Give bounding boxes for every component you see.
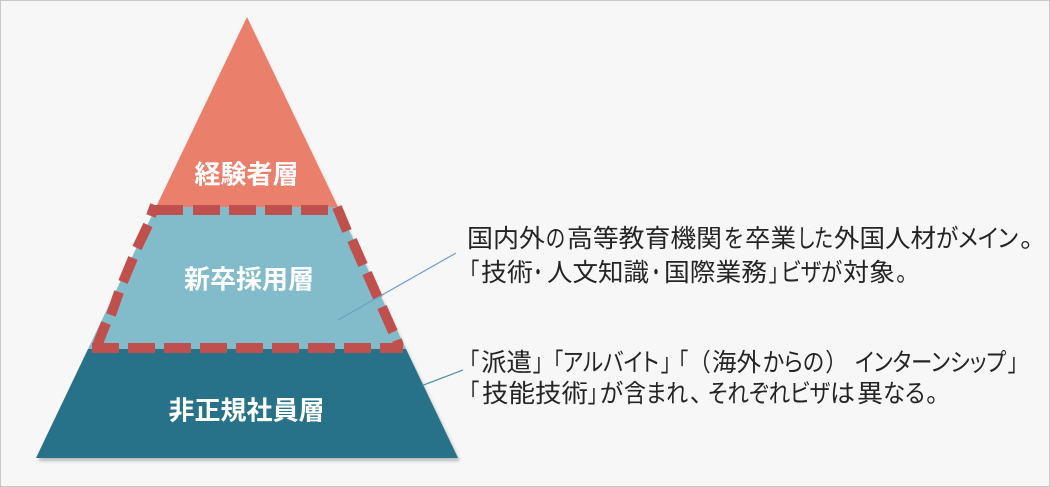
callout text: non-regular employees: 」 <box>1008 343 1018 379</box>
callout text: non-regular employees: 含まれ <box>624 374 688 410</box>
callout text: new graduates: 技術 <box>481 253 533 289</box>
callout text: non-regular employees: は <box>830 374 855 410</box>
callout text: non-regular employees: ビザ <box>790 374 830 410</box>
callout text: non-regular employees: ） <box>826 343 837 379</box>
callout text: non-regular employees: 。 <box>926 374 938 410</box>
callout text: new graduates: 「 <box>469 253 479 289</box>
callout text: non-regular employees: （ <box>699 343 710 379</box>
callout text: new graduates <box>467 219 1033 289</box>
callout text: non-regular employees: それぞれ <box>708 374 790 410</box>
callout text: non-regular employees: 」 <box>588 374 598 410</box>
label: new graduates: 新卒採用層 <box>184 260 314 296</box>
callout text: non-regular employees: 」 <box>533 343 543 379</box>
leader line: non-regular employees <box>421 370 463 386</box>
callout text: new graduates: した <box>798 219 833 255</box>
layer: non-regular employees <box>36 349 458 458</box>
callout text: new graduates: 」 <box>769 253 779 289</box>
callout text: new graduates: 国内外 <box>467 219 545 255</box>
callout text: new graduates: 対象 <box>843 253 895 289</box>
callout text: non-regular employees: 」 <box>661 343 671 379</box>
callout text: new graduates: 国際業務 <box>664 253 767 289</box>
callout text: non-regular employees: 派遣 <box>481 343 532 379</box>
callout text: new graduates: 外国人材 <box>834 219 936 255</box>
layer: experienced <box>156 17 338 207</box>
callout text: non-regular employees: 技能技術 <box>482 374 588 410</box>
label: non-regular employees: 非正規社員層 <box>168 390 325 428</box>
layer: new graduates <box>88 207 406 349</box>
callout text: non-regular employees: アルバイト <box>563 343 659 379</box>
callout text: new graduates: ・ <box>652 253 660 289</box>
callout text: new graduates: の <box>546 219 565 255</box>
callout text: non-regular employees: 「 <box>678 343 688 379</box>
callout text: new graduates: 。 <box>896 253 907 289</box>
callout text: non-regular employees: からの <box>763 343 824 379</box>
callout text: new graduates: 人文知識 <box>547 253 649 289</box>
callout text: non-regular employees: 「 <box>553 343 563 379</box>
callout text: non-regular employees: インターンシップ <box>855 343 1006 379</box>
leader line: new graduates <box>338 253 456 320</box>
callout text: new graduates: 高等教育機関 <box>567 219 722 255</box>
label: experienced: 経験者層 <box>194 154 299 192</box>
dashed highlight around new graduates layer <box>92 205 403 348</box>
callout text: new graduates: ビザが <box>781 253 842 289</box>
callout text: non-regular employees: なる <box>883 374 925 410</box>
callout text: non-regular employees: が <box>600 374 623 410</box>
callout text: new graduates: がメイン <box>936 219 1018 255</box>
callout text: non-regular employees: 海外 <box>712 343 761 379</box>
callout text: non-regular employees: 「 <box>469 343 479 379</box>
callout text: non-regular employees: 異 <box>857 374 883 410</box>
callout text: new graduates: ・ <box>534 253 542 289</box>
callout text: new graduates: を <box>724 219 743 255</box>
callout text: non-regular employees: 「 <box>469 374 479 410</box>
callout text: new graduates: 卒業 <box>745 219 796 255</box>
callout text: new graduates: 。 <box>1020 219 1033 255</box>
callout text: non-regular employees: 、 <box>690 374 702 410</box>
callout text: non-regular employees <box>469 343 1018 410</box>
pyramid <box>36 17 460 461</box>
